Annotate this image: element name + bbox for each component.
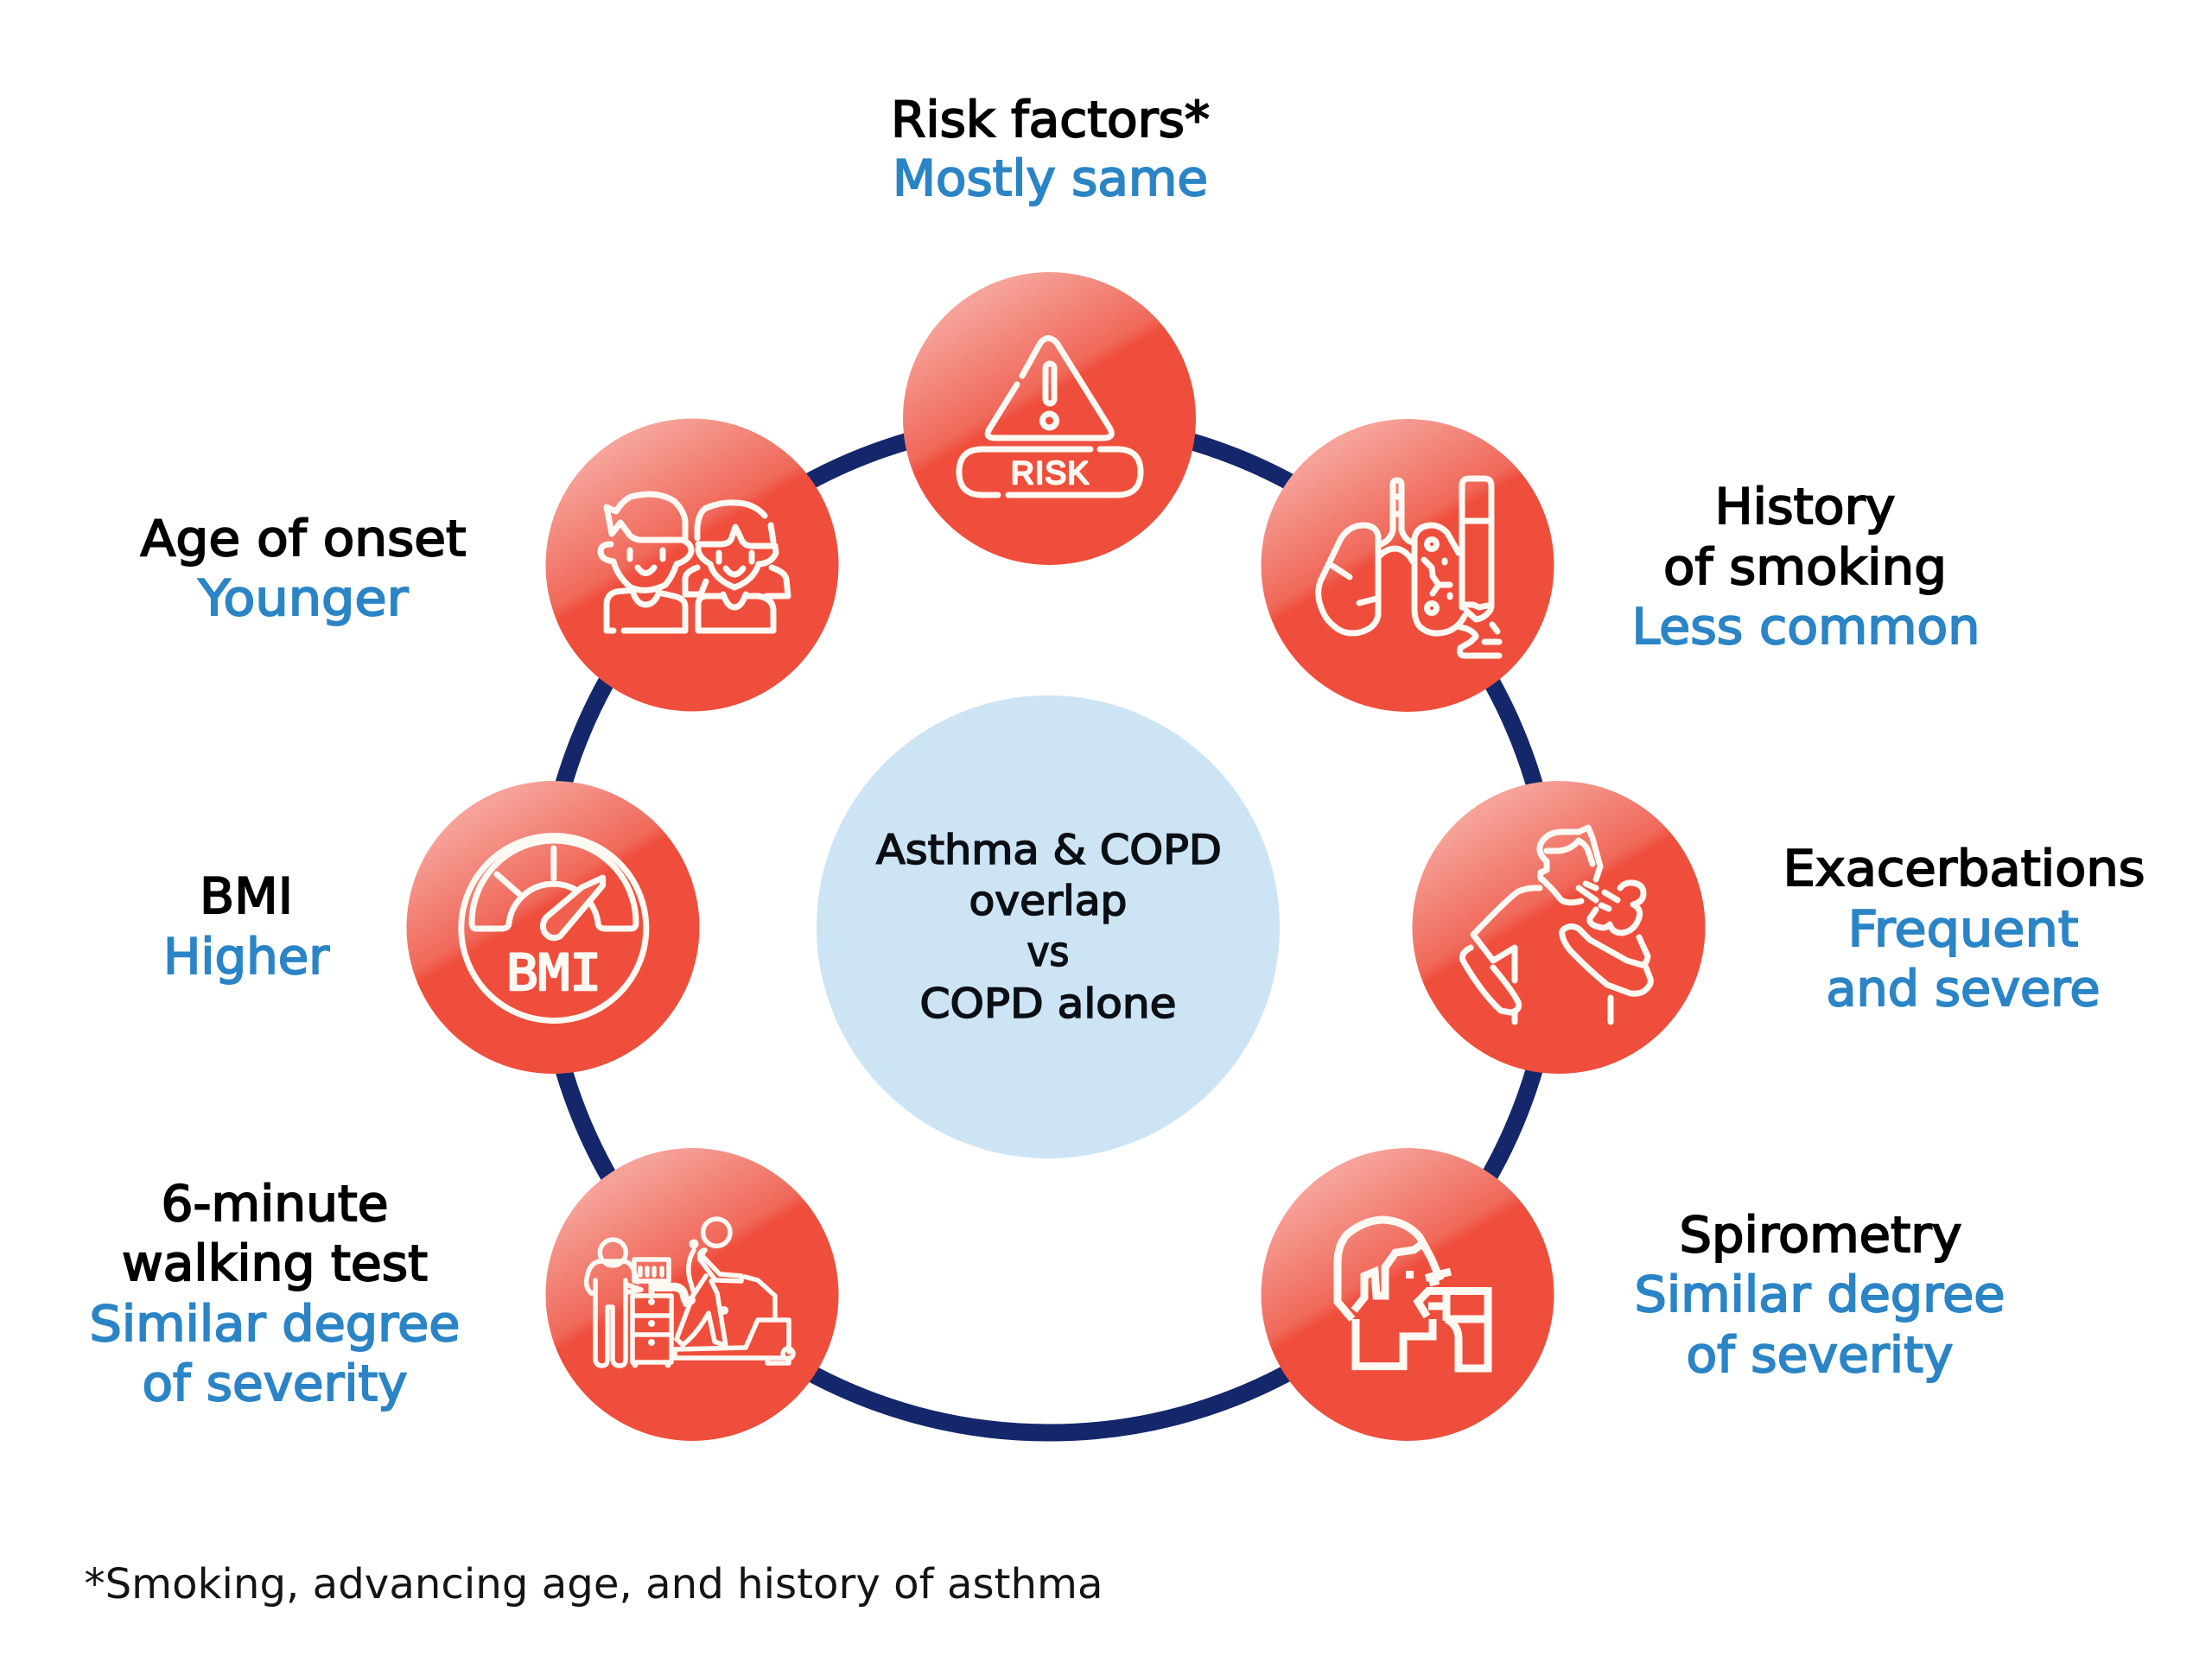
label: risk factors: Mostly same (893, 150, 1208, 207)
label: exacerbations: Exacerbations (1783, 841, 2145, 898)
label: spirometry: of severity (1687, 1327, 1953, 1384)
icon: person using spirometer (1338, 1220, 1488, 1368)
label: history of smoking: Less common (1631, 599, 1980, 656)
center circle: comparison title (817, 695, 1280, 1158)
center circle: comparison title: COPD alone (919, 980, 1177, 1028)
label: age of onset (140, 511, 467, 627)
footnote: *Smoking, advancing age, and history of asthma (85, 1560, 1103, 1608)
label: exacerbations: Frequent (1847, 901, 2079, 958)
label: history of smoking: of smoking (1663, 539, 1947, 596)
label: six-minute walking test: 6-minute (161, 1176, 389, 1233)
label: risk factors (891, 92, 1210, 207)
icon: BMI gauge: BMI (506, 943, 601, 1002)
center circle: comparison title: Asthma & COPD (876, 827, 1222, 874)
connecting ring (543, 422, 1555, 1432)
label: spirometry (1635, 1207, 2005, 1384)
label: age of onset: Age of onset (140, 511, 467, 568)
label: risk factors: Risk factors* (891, 92, 1210, 149)
label: six-minute walking test (90, 1176, 460, 1412)
label: age of onset: Younger (197, 570, 409, 627)
label: spirometry: Similar degree (1635, 1266, 2005, 1323)
label: six-minute walking test: of severity (142, 1355, 407, 1412)
center circle: comparison title: overlap (969, 878, 1127, 925)
label: exacerbations: and severe (1827, 961, 2100, 1018)
badge: six-minute walking test (546, 1148, 838, 1441)
label: BMI: Higher (163, 929, 330, 986)
label: history of smoking (1631, 479, 1980, 656)
label: spirometry: Spirometry (1680, 1207, 1961, 1264)
icon: boy and girl (601, 494, 788, 631)
label: BMI: BMI (200, 868, 293, 925)
label: six-minute walking test: Similar degree (90, 1296, 460, 1353)
label: six-minute walking test: walking test (122, 1235, 428, 1292)
badge: risk factors (903, 272, 1196, 565)
label: exacerbations (1783, 841, 2145, 1018)
center circle: comparison title: vs (1027, 929, 1070, 976)
icon: BMI gauge (461, 836, 646, 1021)
badge: age of onset (546, 418, 838, 712)
badge: BMI (406, 781, 700, 1074)
icon: lungs and cigarette (1319, 479, 1499, 656)
icon: warning triangle with RISK label: RISK (1011, 455, 1089, 491)
badge: spirometry (1262, 1148, 1554, 1441)
icon: clinician and patient on treadmill (587, 1219, 793, 1368)
icon: warning triangle with RISK label (959, 339, 1141, 495)
label: BMI (163, 868, 330, 986)
badge: exacerbations (1412, 781, 1706, 1074)
badge: history of smoking (1262, 419, 1554, 712)
label: history of smoking: History (1714, 479, 1896, 536)
icon: person coughing (1462, 828, 1650, 1022)
